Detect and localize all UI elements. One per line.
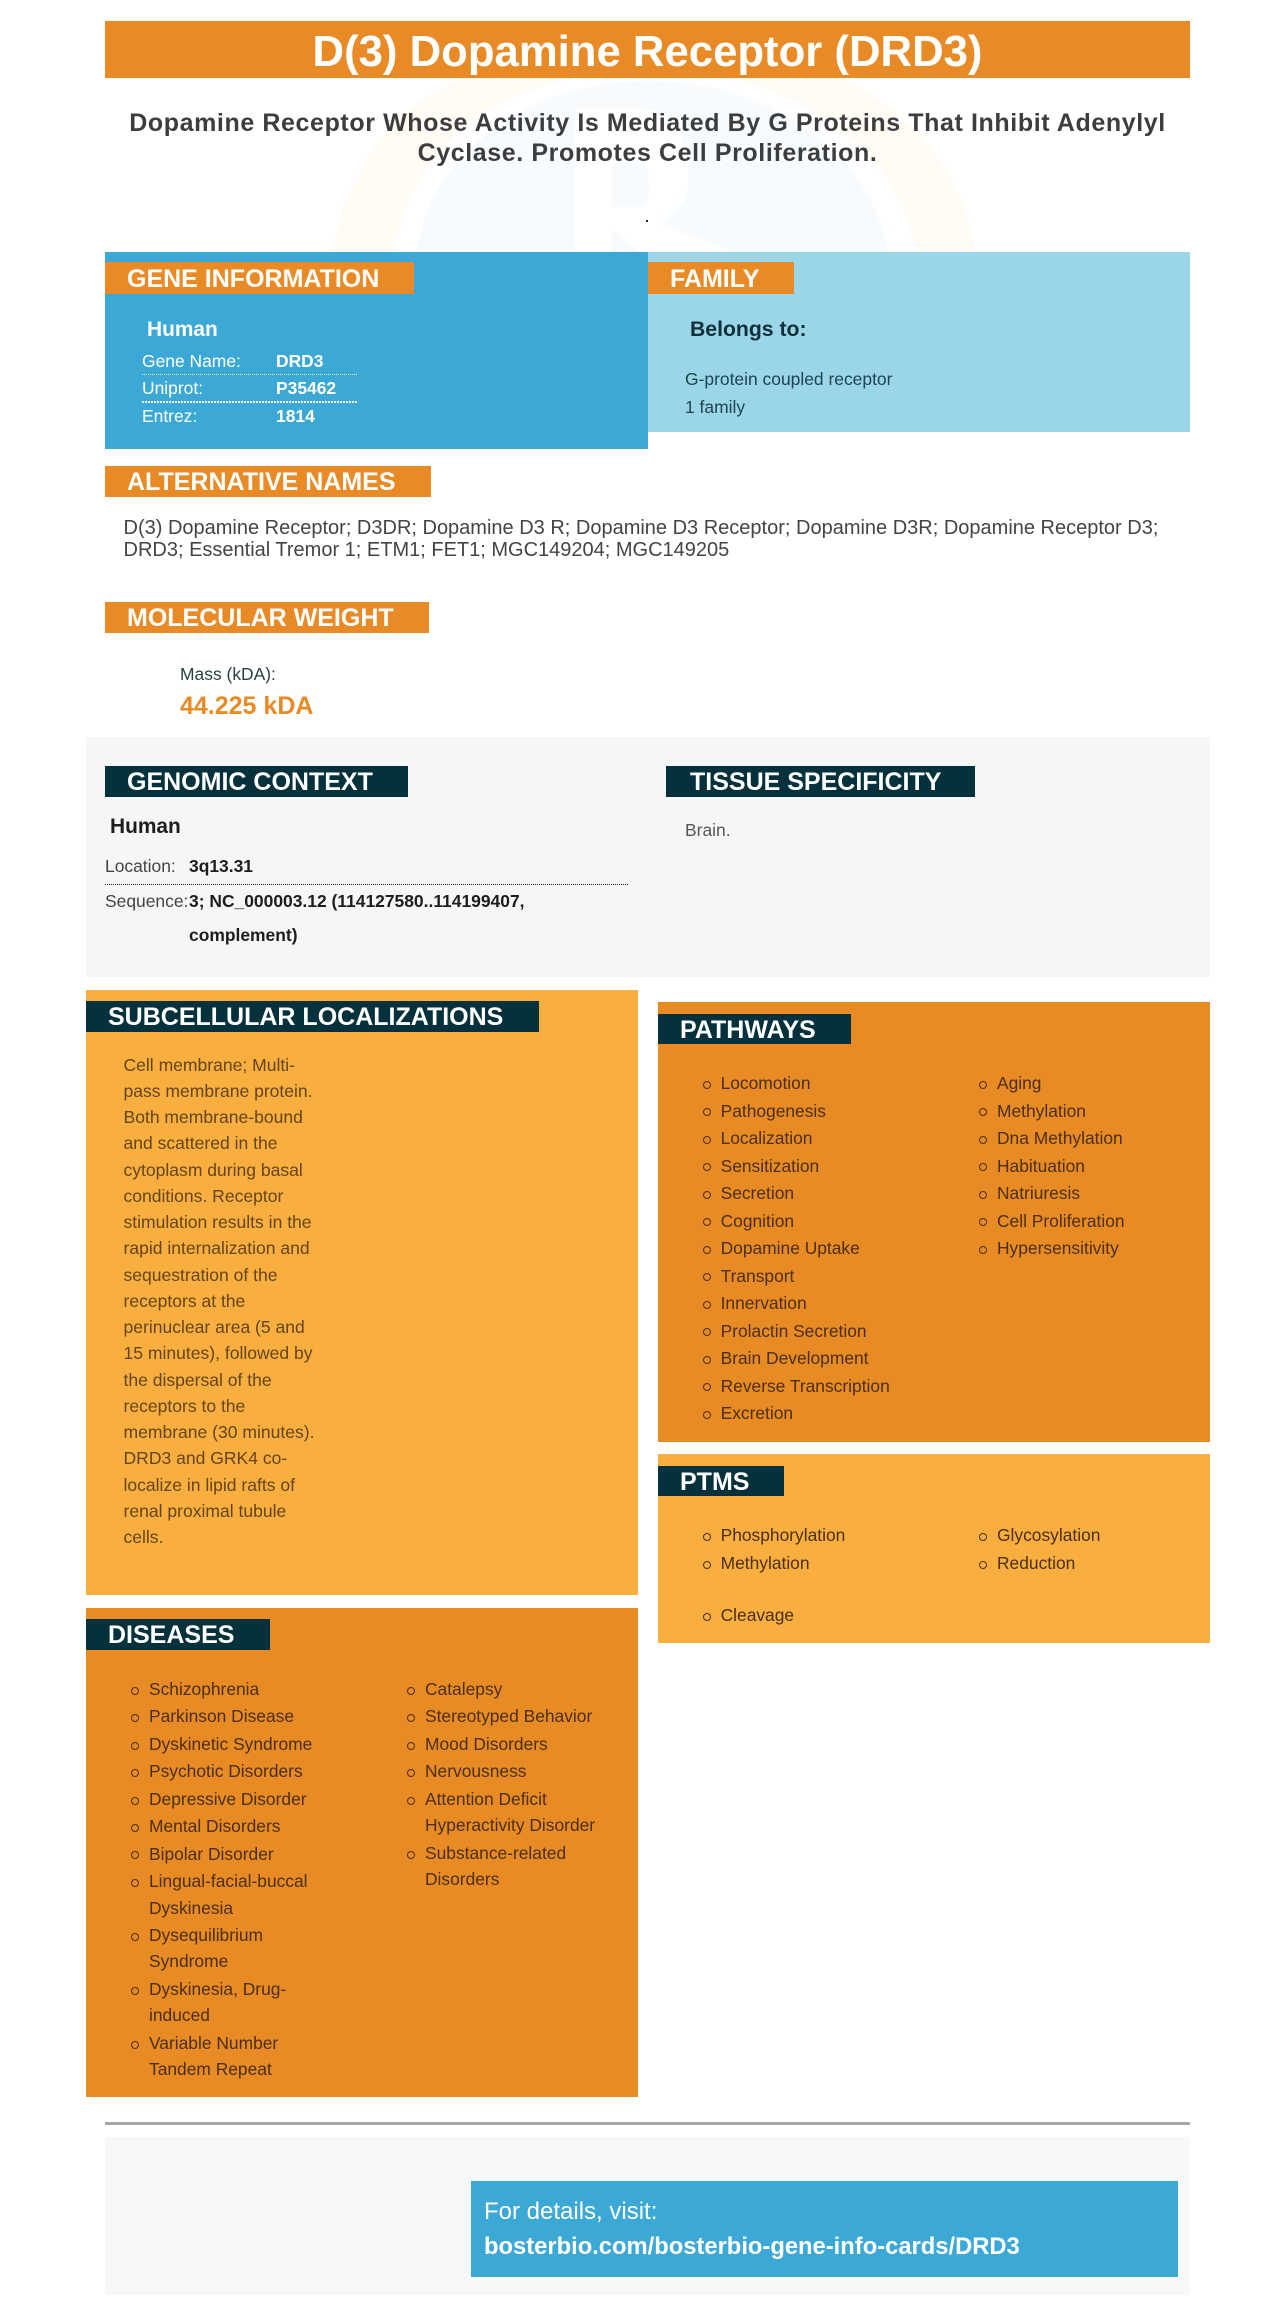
heading: ptms <box>658 1466 784 1496</box>
diseases list column 2: Stereotyped Behavior <box>425 1706 592 1726</box>
heading: pathways: PATHWAYS <box>680 1016 816 1044</box>
localization text: localize in lipid rafts of <box>124 1475 295 1495</box>
pathways list column 1: Brain Development <box>721 1348 868 1368</box>
diseases list column 1: Dysequilibrium <box>149 1925 263 1945</box>
pathways list column 2: Habituation <box>997 1156 1085 1176</box>
pathways list column 1: Innervation <box>721 1293 807 1313</box>
localization text: rapid internalization and <box>124 1238 310 1258</box>
diseases list column 1: Dyskinesia <box>149 1898 233 1918</box>
diseases list column 2 <box>407 1679 595 1889</box>
panel: diseases <box>86 1608 638 2097</box>
entrez row: 1814 <box>276 406 315 426</box>
heading: diseases: DISEASES <box>108 1621 234 1649</box>
tissue text: Brain. <box>685 820 731 840</box>
uniprot row: P35462 <box>276 378 336 398</box>
details url: bosterbio.com/bosterbio-gene-info-cards/DRD3 <box>484 2233 1020 2260</box>
heading: molecular weight: MOLECULAR WEIGHT <box>127 604 394 632</box>
location row: 3q13.31 <box>189 856 253 876</box>
ptms list column 2: Reduction <box>997 1553 1075 1573</box>
pathways list column 1: Pathogenesis <box>721 1100 826 1120</box>
localization text: perinuclear area (5 and <box>124 1317 305 1337</box>
pathways list column 1: Transport <box>721 1266 794 1286</box>
localization text: the dispersal of the <box>124 1370 272 1390</box>
heading: family <box>648 262 794 294</box>
pathways list column 1: Dopamine Uptake <box>721 1238 860 1258</box>
uniprot row: Uniprot: <box>142 378 203 398</box>
callout: details link <box>471 2181 1178 2277</box>
diseases list column 1: Psychotic Disorders <box>149 1761 303 1781</box>
sequence row <box>105 891 524 945</box>
heading: diseases <box>86 1619 270 1650</box>
pathways list column 1: Excretion <box>721 1403 793 1423</box>
panel: pathways <box>658 1002 1210 1442</box>
alternative names text: D(3) Dopamine Receptor; D3DR; Dopamine D3 R; Dopamine D3 Receptor; Dopamine D3R; Dopamine Receptor D3; <box>124 517 1158 539</box>
uniprot row <box>142 378 336 398</box>
localization text: and scattered in the <box>124 1133 278 1153</box>
diseases list column 1 <box>131 1679 312 2079</box>
pathways list column 1: Cognition <box>721 1210 794 1230</box>
sequence row: Sequence: <box>105 891 188 911</box>
localization text: Cell membrane; Multi- <box>124 1054 295 1074</box>
small dot <box>646 220 648 222</box>
diseases list column 1: Lingual-facial-buccal <box>149 1871 308 1891</box>
diseases list column 1: Mental Disorders <box>149 1816 280 1836</box>
diseases list column 2: Disorders <box>425 1869 499 1889</box>
belongs to label: Belongs to: <box>690 318 807 341</box>
gene name row <box>142 351 323 371</box>
heading: gene information: GENE INFORMATION <box>127 265 379 293</box>
pathways list column 1: Secretion <box>721 1183 794 1203</box>
localization text: receptors at the <box>124 1291 245 1311</box>
entrez row: Entrez: <box>142 406 197 426</box>
panel: subcellular localizations <box>86 990 638 1595</box>
gene name row: Gene Name: <box>142 351 241 371</box>
diseases list column 1: Bipolar Disorder <box>149 1844 274 1864</box>
pathways list column 2: Hypersensitivity <box>997 1238 1119 1258</box>
entrez row <box>142 406 315 426</box>
diseases list column 2: Attention Deficit <box>425 1789 547 1809</box>
pathways list column 1: Prolactin Secretion <box>721 1320 867 1340</box>
localization text: membrane (30 minutes). <box>124 1422 314 1442</box>
pathways list column 2: Methylation <box>997 1100 1086 1120</box>
panel: gene information <box>105 252 648 449</box>
alternative names text <box>124 517 1158 561</box>
pathways list column 2: Dna Methylation <box>997 1128 1123 1148</box>
subtitle: Cyclase. Promotes Cell Proliferation. <box>418 138 877 166</box>
sequence row: 3; NC_000003.12 (114127580..114199407, <box>189 891 524 911</box>
diseases list column 1: Schizophrenia <box>149 1679 259 1699</box>
diseases list column 1: Dyskinetic Syndrome <box>149 1734 312 1754</box>
pathways list column 2: Natriuresis <box>997 1183 1080 1203</box>
family text: 1 family <box>685 397 745 417</box>
localization text: DRD3 and GRK4 co- <box>124 1448 287 1468</box>
pathways list column 2: Cell Proliferation <box>997 1210 1125 1230</box>
heading: genomic context: GENOMIC CONTEXT <box>127 768 373 796</box>
localization text: stimulation results in the <box>124 1212 312 1232</box>
localization text <box>124 1054 314 1547</box>
localization text: pass membrane protein. <box>124 1081 313 1101</box>
diseases list column 1: Parkinson Disease <box>149 1706 294 1726</box>
title: D(3) Dopamine Receptor (DRD3) <box>313 27 982 76</box>
pathways list column 1 <box>703 1073 890 1423</box>
species label: Human <box>110 815 181 838</box>
ptms list column 2 <box>979 1525 1100 1573</box>
diseases list column 1: Tandem Repeat <box>149 2059 272 2079</box>
diseases list column 1: Variable Number <box>149 2033 278 2053</box>
heading: tissue specificity: TISSUE SPECIFICITY <box>690 768 941 796</box>
title <box>105 21 1190 78</box>
location row <box>105 856 253 876</box>
ptms list column 1: Phosphorylation <box>721 1525 845 1545</box>
subtitle <box>129 109 1166 166</box>
ptms list column 2: Glycosylation <box>997 1525 1100 1545</box>
pathways list column 1: Localization <box>721 1128 812 1148</box>
sequence row: complement) <box>189 925 298 945</box>
diseases list column 2: Mood Disorders <box>425 1734 548 1754</box>
localization text: sequestration of the <box>124 1265 278 1285</box>
heading: ptms: PTMS <box>680 1468 749 1496</box>
pathways list column 1: Sensitization <box>721 1156 819 1176</box>
pathways list column 1: Locomotion <box>721 1073 811 1093</box>
ptms list column 1: Methylation <box>721 1553 810 1573</box>
species label: Human <box>147 318 218 341</box>
diseases list column 1: Dyskinesia, Drug- <box>149 1979 286 1999</box>
ptms list column 1: Cleavage <box>721 1605 794 1625</box>
pathways list column 2 <box>979 1073 1125 1258</box>
family text <box>685 369 892 417</box>
location row: Location: <box>105 856 176 876</box>
panel: genomic context and tissue specificity <box>86 737 1210 977</box>
panel: footer <box>105 2137 1190 2295</box>
heading: alternative names: ALTERNATIVE NAMES <box>127 468 396 496</box>
localization text: receptors to the <box>124 1396 245 1416</box>
heading: family: FAMILY <box>670 265 759 293</box>
localization text: 15 minutes), followed by <box>124 1343 313 1363</box>
watermark logo <box>333 78 975 252</box>
pathways list column 2: Aging <box>997 1073 1041 1093</box>
localization text: cytoplasm during basal <box>124 1160 303 1180</box>
diseases list column 2: Substance-related <box>425 1843 566 1863</box>
heading: pathways <box>658 1014 851 1044</box>
family text: G-protein coupled receptor <box>685 369 892 389</box>
gene name row: DRD3 <box>276 351 323 371</box>
localization text: cells. <box>124 1527 163 1547</box>
alternative names text: DRD3; Essential Tremor 1; ETM1; FET1; MGC149204; MGC149205 <box>124 539 729 561</box>
details label: For details, visit: <box>484 2198 657 2225</box>
pathways list column 1: Reverse Transcription <box>721 1376 890 1396</box>
diseases list column 1: Depressive Disorder <box>149 1789 307 1809</box>
localization text: Both membrane-bound <box>124 1107 303 1127</box>
diseases list column 2: Hyperactivity Disorder <box>425 1815 595 1835</box>
panel: ptms <box>658 1454 1210 1643</box>
diseases list column 2: Catalepsy <box>425 1679 502 1699</box>
mass value: 44.225 kDA <box>180 692 313 720</box>
mass label: Mass (kDA): <box>180 664 276 684</box>
diseases list column 1: induced <box>149 2005 210 2025</box>
localization text: renal proximal tubule <box>124 1501 286 1521</box>
panel: family <box>648 252 1190 432</box>
diseases list column 1: Syndrome <box>149 1951 228 1971</box>
diseases list column 2: Nervousness <box>425 1761 526 1781</box>
heading: subcellular localizations: SUBCELLULAR LOCALIZATIONS <box>108 1003 503 1031</box>
ptms list column 1 <box>703 1525 845 1625</box>
localization text: conditions. Receptor <box>124 1186 283 1206</box>
subtitle: Dopamine Receptor Whose Activity Is Mediated By G Proteins That Inhibit Adenylyl <box>129 109 1166 137</box>
